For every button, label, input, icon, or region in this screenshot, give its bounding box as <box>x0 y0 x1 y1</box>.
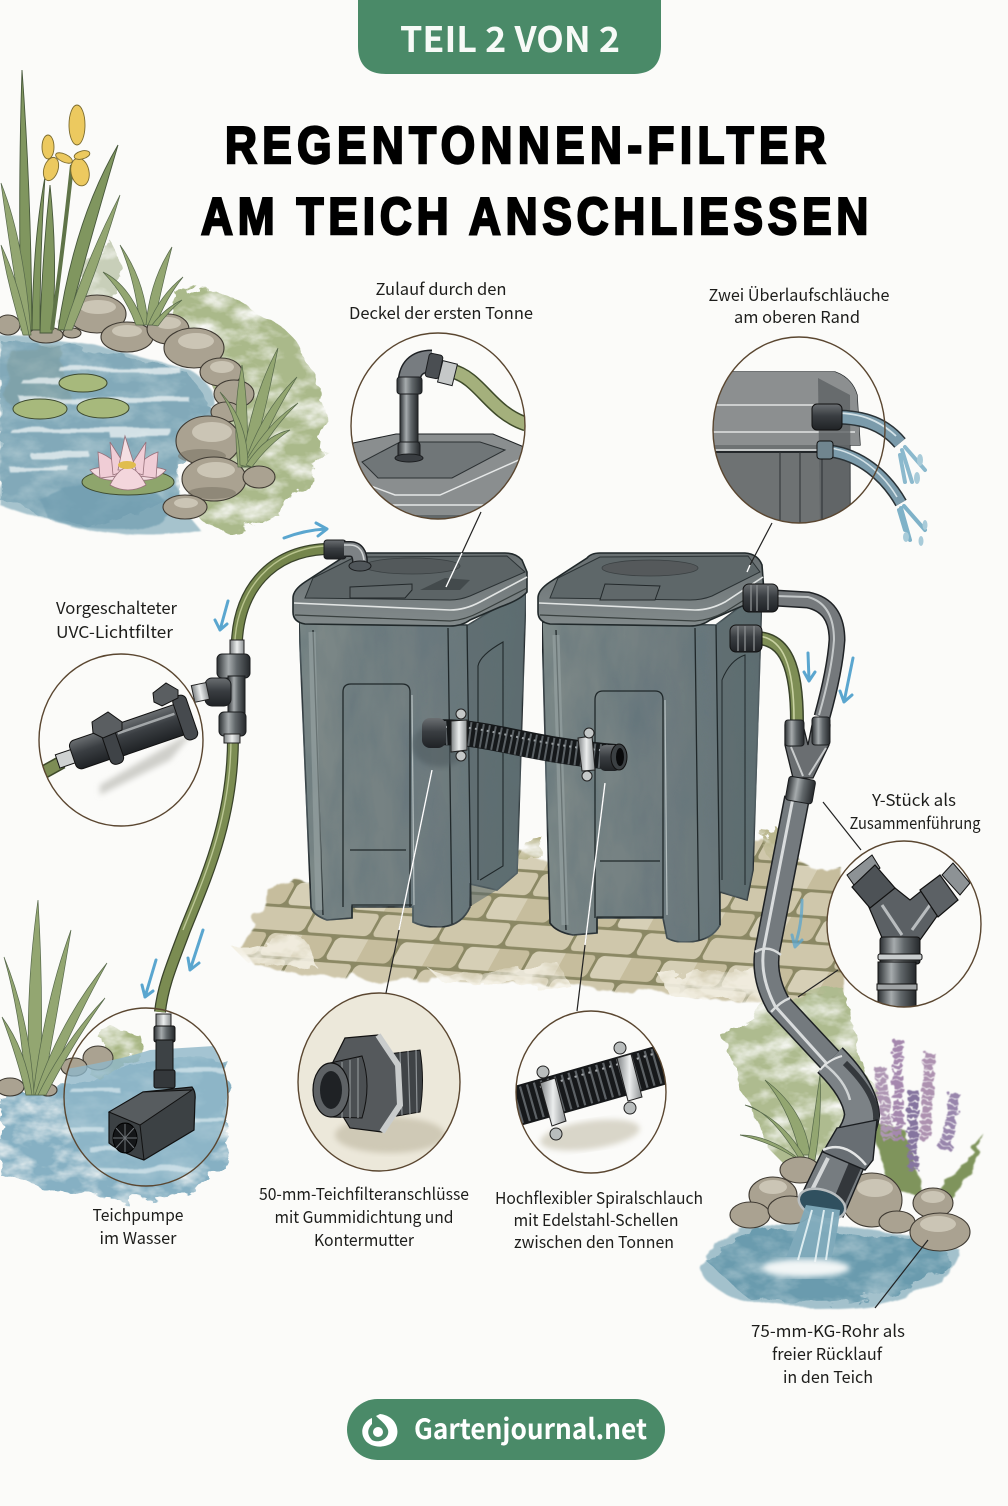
clamps <box>540 1078 566 1126</box>
green hose in <box>452 371 526 424</box>
filter body <box>54 682 198 770</box>
label: spiral hose <box>495 1185 703 1253</box>
label: return pipe <box>751 1318 905 1388</box>
label: UVC filter <box>56 595 178 643</box>
label: pump: im Wasser <box>100 1225 177 1249</box>
reed leaves and iris <box>1 70 120 335</box>
barrel lid <box>538 553 764 626</box>
overflow outlets, Y-piece and return pipe <box>730 584 877 1277</box>
title: REGENTONNEN-FILTER <box>225 117 831 175</box>
header badge: TEIL 2 VON 2 <box>400 12 620 63</box>
pond water <box>700 1220 960 1309</box>
small reed clumps <box>103 245 298 467</box>
circle: Y-piece <box>827 841 981 1012</box>
lid close-up <box>353 434 522 515</box>
label: pump: Teichpumpe <box>92 1202 184 1226</box>
label: UVC filter: UVC-Lichtfilter <box>56 619 174 643</box>
label: Y-piece: Zusammenführung <box>850 810 981 834</box>
barrel front panel <box>595 691 663 918</box>
label: spiral hose: Hochflexibler Spiralschlauch <box>495 1185 703 1209</box>
label: pump <box>92 1202 184 1249</box>
barrel 1 (left) <box>293 553 527 927</box>
barrel body <box>299 590 526 927</box>
pond water <box>0 336 214 535</box>
pump housing <box>109 1087 195 1160</box>
circle: pond pump in water <box>60 1008 230 1190</box>
label: Y-piece: Y-Stück als <box>871 787 956 811</box>
barrel close-up <box>714 371 861 522</box>
lower overflow hose <box>730 625 797 722</box>
supply hose with UVC T-piece <box>160 540 371 1012</box>
pump stem <box>156 1014 171 1028</box>
footer badge: Gartenjournal.net <box>414 1408 647 1448</box>
label: tank connectors: mit Gummidichtung und <box>274 1204 454 1228</box>
lavender <box>880 1040 955 1170</box>
flow arrows <box>142 523 853 997</box>
hex nut <box>333 1035 400 1132</box>
circle: UVC light filter <box>35 654 203 826</box>
collars <box>852 865 895 908</box>
illustration: pond with water lily and iris, top left <box>0 70 326 535</box>
label: UVC filter: Vorgeschalteter <box>56 595 178 619</box>
outflowing water <box>762 1205 850 1277</box>
vertical pipe with elbow <box>400 394 418 442</box>
return pipe <box>755 776 877 1225</box>
rocks along pond edge <box>0 295 275 519</box>
thin pipe ends <box>847 855 880 888</box>
label: inlet: Zulauf durch den <box>376 276 506 300</box>
circle: two overflow hoses <box>700 337 928 546</box>
water patch <box>0 1056 228 1198</box>
illustration: pump pond left background <box>0 900 228 1198</box>
label: overflow hoses: Zwei Überlaufschläuche <box>708 282 890 306</box>
circle: inlet through lid of first barrel <box>350 333 530 530</box>
steel clamps <box>451 709 595 781</box>
green hose upper <box>237 549 325 640</box>
label: overflow hoses <box>708 282 890 328</box>
rear thread <box>393 1050 423 1117</box>
header badge <box>358 0 661 74</box>
title <box>201 117 873 246</box>
large collar and pipe end <box>800 1150 865 1217</box>
overflow hoses <box>812 404 901 503</box>
label: return pipe: freier Rücklauf <box>772 1341 883 1365</box>
iris buds and petals <box>41 105 92 188</box>
label: spiral hose: mit Edelstahl-Schellen <box>514 1207 678 1231</box>
side plant leaves <box>740 1075 820 1165</box>
spiral hose between barrels <box>412 709 627 781</box>
label: inlet <box>349 276 533 324</box>
label: tank connectors: Kontermutter <box>314 1227 415 1251</box>
barrel front panel <box>343 684 410 907</box>
green hose <box>35 762 62 777</box>
icon: logo leaf <box>362 1414 397 1447</box>
faded shrub behind reeds <box>60 240 125 330</box>
water inside circle <box>60 1045 230 1190</box>
front thread <box>330 1056 367 1118</box>
label: Y-piece <box>850 787 981 834</box>
circle: 50 mm tank connector <box>298 993 460 1171</box>
illustration: outflow pond with plants, bottom right <box>700 990 985 1309</box>
label: return pipe: 75-mm-KG-Rohr als <box>751 1318 905 1342</box>
inlet elbow on lid <box>324 540 371 571</box>
shadow <box>98 736 190 796</box>
label: inlet: Deckel der ersten Tonne <box>349 300 533 324</box>
Y body <box>868 888 945 940</box>
label: spiral hose: zwischen den Tonnen <box>514 1229 674 1253</box>
label: return pipe: in den Teich <box>783 1364 873 1388</box>
upper overflow pipe <box>743 584 837 717</box>
leader lines <box>386 512 928 1308</box>
title: AM TEICH ANSCHLIESSEN <box>201 188 873 246</box>
T-piece connector <box>191 640 250 743</box>
green hose lower <box>160 738 233 1012</box>
water drops <box>899 447 928 546</box>
green bushes behind pond <box>170 289 326 531</box>
barrel lid <box>293 553 527 626</box>
moss and foliage <box>725 990 880 1180</box>
water lily flower <box>82 436 174 495</box>
bank with rocks <box>0 1025 145 1096</box>
label: tank connectors: 50-mm-Teichfilteranschlüsse <box>259 1181 469 1205</box>
reed leaves <box>2 900 107 1095</box>
barrel body <box>542 590 762 942</box>
label: overflow hoses: am oberen Rand <box>734 304 860 328</box>
rocks around outflow <box>730 1157 970 1251</box>
barrel 2 (right) <box>538 553 764 942</box>
lily pads <box>13 374 129 419</box>
label: tank connectors <box>259 1181 469 1251</box>
circle: spiral hose with clamps <box>510 1011 672 1173</box>
ground: stone paving under barrels <box>230 826 845 1006</box>
footer badge <box>347 1399 665 1460</box>
Y-piece <box>785 717 830 778</box>
